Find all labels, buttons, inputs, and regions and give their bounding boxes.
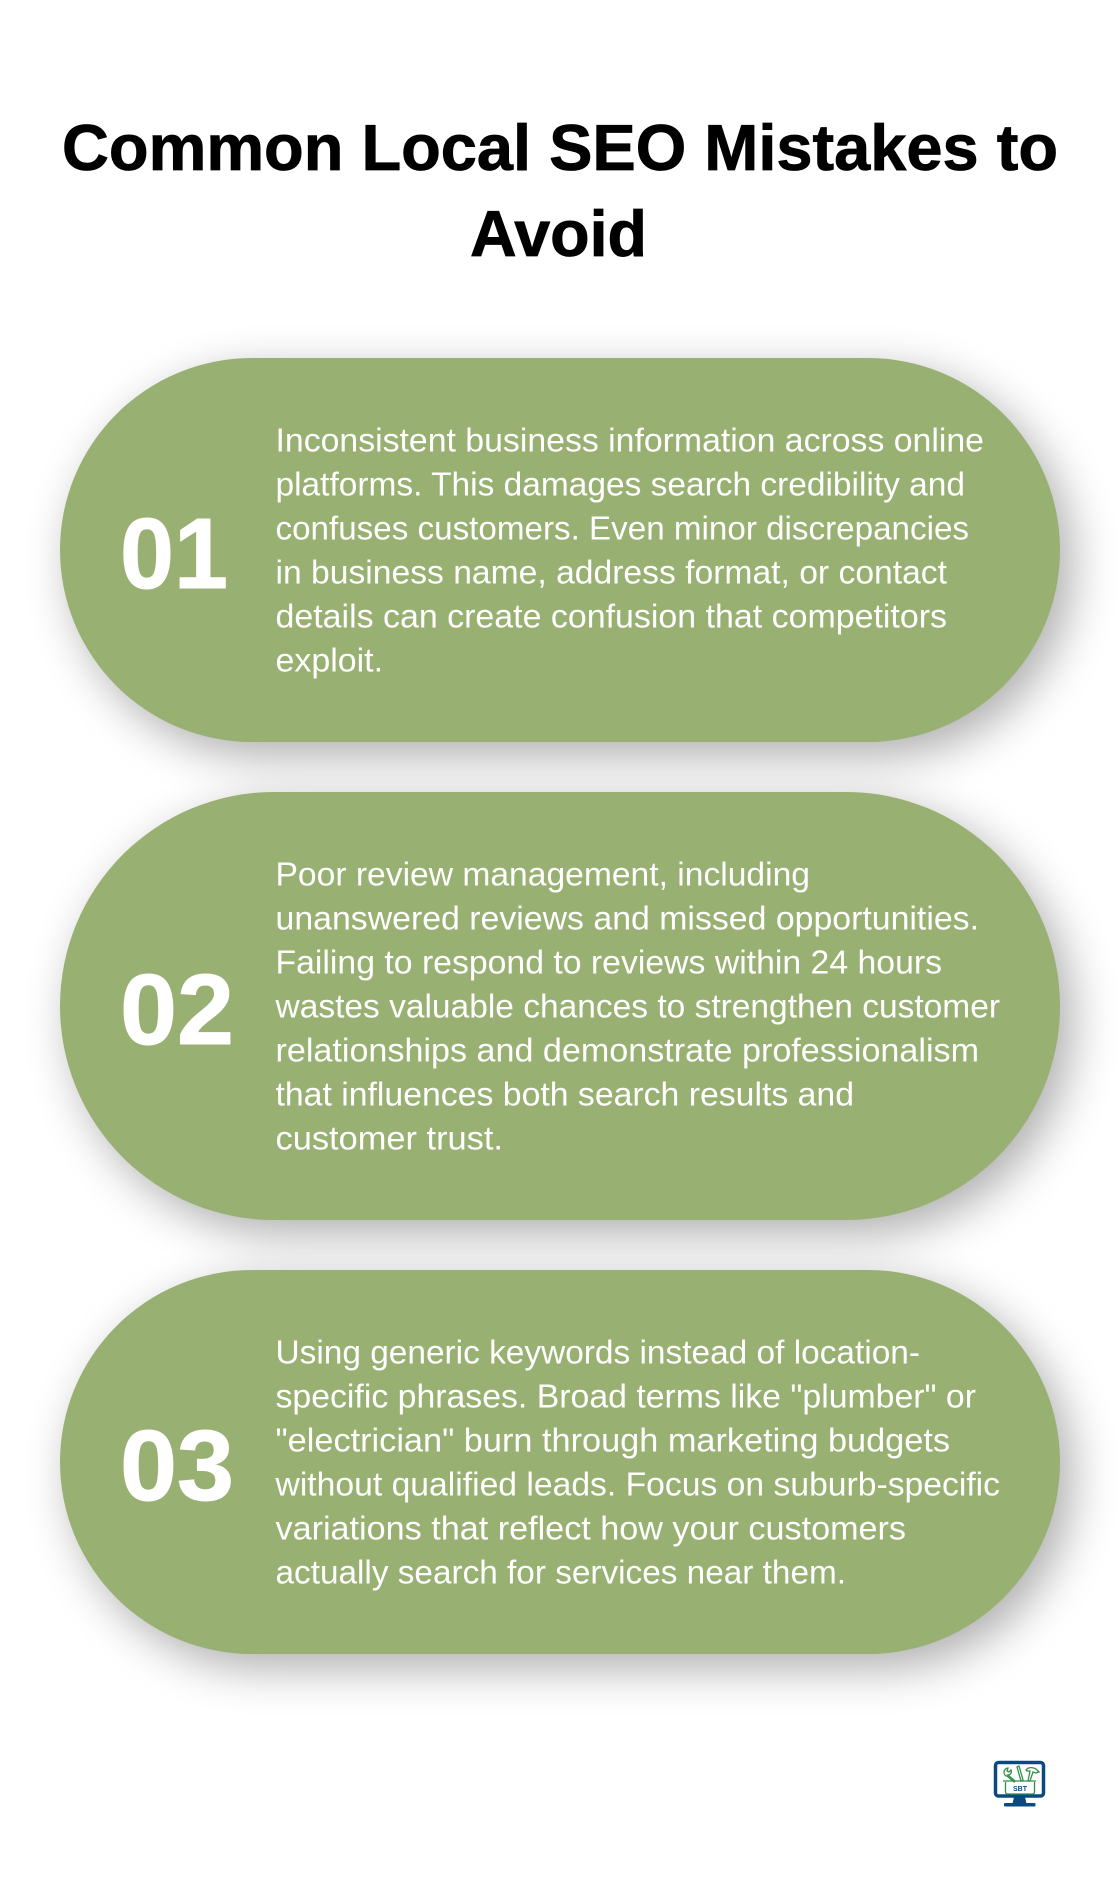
- panel: mistake 01: [60, 358, 1060, 742]
- text: poor review management: that influences both search results and: [276, 1076, 854, 1113]
- text: poor review management: relationships and demonstrate professionalism: [276, 1032, 979, 1069]
- text: generic keywords: "electrician" burn through marketing budgets: [276, 1422, 950, 1459]
- text: poor review management: wastes valuable chances to strengthen customer: [274, 988, 1000, 1025]
- title: Avoid: [470, 197, 647, 270]
- text: poor review management: Failing to respond to reviews within 24 hours: [276, 944, 942, 981]
- text: inconsistent business information: platforms. This damages search credibility and: [276, 466, 965, 503]
- icon: monitor with toolbox logo: SBT: [1013, 1786, 1028, 1793]
- text: poor review management: [274, 856, 1000, 1157]
- text: generic keywords: specific phrases. Broad terms like "plumber" or: [276, 1378, 976, 1415]
- title: [62, 111, 1058, 270]
- text: poor review management: unanswered reviews and missed opportunities.: [276, 900, 979, 937]
- text: generic keywords: [274, 1334, 1000, 1591]
- panel: mistake 02: [60, 792, 1060, 1220]
- text: generic keywords: variations that reflect how your customers: [276, 1510, 906, 1547]
- text: inconsistent business information: details can create confusion that competitors: [276, 598, 947, 635]
- text: inconsistent business information: confuses customers. Even minor discrepancies: [276, 510, 969, 547]
- number 01: 01: [120, 498, 228, 610]
- number 03: 03: [120, 1410, 234, 1522]
- number 02: 02: [120, 954, 234, 1066]
- text: poor review management: Poor review management, including: [276, 856, 810, 893]
- text: generic keywords: without qualified leads. Focus on suburb-specific: [274, 1466, 1000, 1503]
- icon: monitor with toolbox logo: [994, 1760, 1046, 1806]
- text: inconsistent business information: exploit.: [276, 642, 383, 679]
- text: poor review management: customer trust.: [276, 1120, 503, 1157]
- text: inconsistent business information: [276, 422, 984, 679]
- text: inconsistent business information: in business name, address format, or contact: [276, 554, 947, 591]
- text: generic keywords: Using generic keywords instead of location-: [276, 1334, 920, 1371]
- title: Common Local SEO Mistakes to: [62, 111, 1058, 184]
- panel: mistake 03: [60, 1270, 1060, 1654]
- text: inconsistent business information: Inconsistent business information across online: [276, 422, 984, 459]
- text: generic keywords: actually search for services near them.: [276, 1554, 846, 1591]
